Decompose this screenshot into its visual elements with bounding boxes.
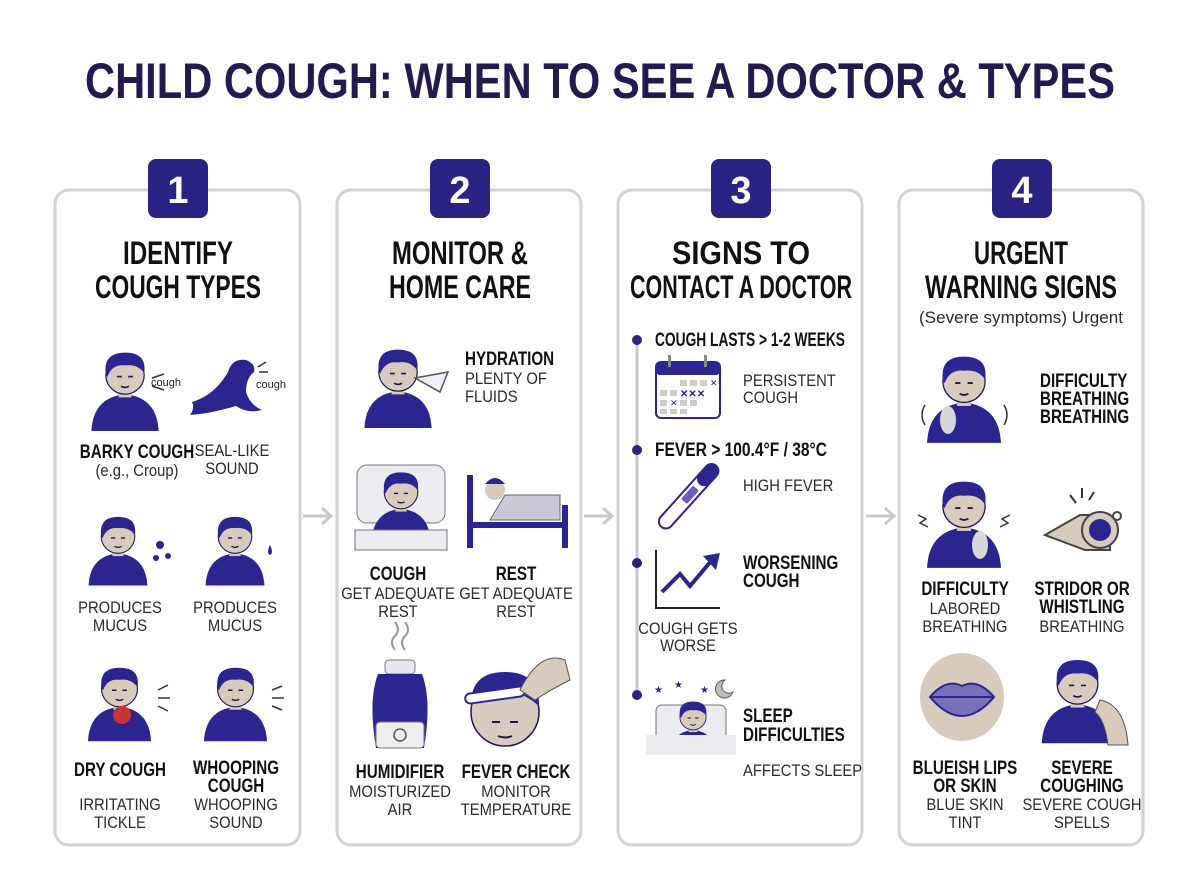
label: produces mucus 1: MUCUS — [93, 617, 147, 635]
label: hydration: HYDRATION — [465, 347, 554, 369]
label: hydration: PLENTY OF — [465, 370, 547, 388]
badge 2: 2 — [449, 170, 471, 212]
icon: seal — [190, 360, 286, 415]
label: difficulty labored: BREATHING — [922, 618, 1008, 636]
label: worsening cough: WORSENING — [743, 551, 838, 573]
label: cough rest: COUGH — [370, 562, 426, 584]
label: hydration: FLUIDS — [465, 388, 518, 406]
label: blueish lips — [913, 756, 1017, 832]
heading 1: COUGH TYPES — [95, 269, 261, 305]
label: dry cough — [74, 758, 166, 832]
label: cough gets worse: WORSE — [660, 637, 716, 655]
label: high fever: HIGH FEVER — [743, 477, 833, 495]
icon: calendar: ✕✕✕ — [680, 389, 705, 400]
label: fever check: MONITOR — [481, 783, 551, 801]
label: blueish lips: TINT — [949, 814, 982, 832]
label: cough rest: GET ADEQUATE — [341, 585, 455, 603]
icon: seal: cough — [256, 379, 286, 391]
heading 2 — [389, 235, 531, 305]
label: fever: FEVER > 100.4°F / 38°C — [655, 440, 827, 461]
label: produces mucus 1: PRODUCES — [78, 599, 162, 617]
heading 3 — [630, 235, 852, 305]
label: difficulty labored: LABORED — [930, 600, 1000, 618]
icon: calendar: ✕ — [710, 378, 718, 388]
panel: urgent warning signs — [899, 159, 1143, 845]
icon: sleeping kid: ★ — [674, 680, 683, 691]
label: dry cough: IRRITATING — [79, 796, 161, 814]
label: difficulty breathing: DIFFICULTY — [1040, 369, 1128, 391]
label: humidifier: AIR — [388, 801, 412, 819]
badge 3 — [711, 159, 771, 218]
label: cough gets worse — [638, 620, 738, 655]
label: rest: GET ADEQUATE — [459, 585, 573, 603]
label: barky cough — [80, 440, 194, 480]
timeline — [632, 335, 642, 700]
label: difficulty breathing: BREATHING — [1040, 387, 1129, 409]
label: produces mucus 2: MUCUS — [208, 617, 262, 635]
icon: barky cough kid: cough — [151, 377, 181, 389]
label: rest — [459, 562, 573, 621]
label: rest: REST — [496, 562, 537, 584]
label: fever check: TEMPERATURE — [461, 801, 571, 819]
label: stridor: WHISTLING — [1039, 595, 1125, 617]
badge 3: 3 — [730, 170, 752, 212]
label: cough lasts: COUGH LASTS > 1-2 WEEKS — [655, 330, 845, 351]
heading 3: SIGNS TO — [672, 235, 810, 271]
label: severe coughing: SEVERE COUGH — [1022, 796, 1142, 814]
label: sleep difficulties: SLEEP — [743, 704, 793, 726]
heading 2: MONITOR & — [392, 235, 528, 271]
label: difficulty breathing — [1040, 369, 1129, 427]
icon: whooping kid — [204, 668, 284, 741]
badge 1 — [148, 159, 208, 218]
icon: severe cough kid — [1042, 660, 1128, 745]
heading 3: CONTACT A DOCTOR — [630, 269, 852, 305]
label: dry cough: TICKLE — [94, 814, 146, 832]
label: hydration — [465, 347, 554, 406]
label: severe coughing — [1022, 756, 1142, 832]
badge 2 — [430, 159, 490, 218]
heading 4: URGENT — [974, 235, 1068, 271]
badge 4: 4 — [1011, 170, 1033, 212]
label: humidifier: HUMIDIFIER — [356, 760, 445, 782]
heading 2: HOME CARE — [389, 269, 531, 305]
label: persistent cough: COUGH — [743, 389, 798, 407]
icon: chart — [656, 550, 720, 608]
label: cough gets worse: COUGH GETS — [638, 620, 738, 638]
icon: fever check — [465, 658, 570, 746]
label: blueish lips: BLUE SKIN — [926, 796, 1004, 814]
label: persistent cough: PERSISTENT — [743, 372, 836, 390]
label: blueish lips: OR SKIN — [933, 774, 997, 796]
label: humidifier — [349, 760, 451, 819]
label: sleep difficulties — [743, 704, 845, 745]
arrow: 3 to 4 — [866, 508, 894, 524]
label: humidifier: MOISTURIZED — [349, 783, 451, 801]
badge 4 — [992, 159, 1052, 218]
label: fever check — [461, 760, 571, 819]
icon: whistle — [1045, 488, 1121, 550]
icon: sleeping kid — [646, 680, 736, 755]
label: whooping: SOUND — [209, 814, 263, 832]
label: severe coughing: COUGHING — [1040, 774, 1124, 796]
icon: humidifier — [372, 622, 428, 748]
icon: mucus kid 1 — [89, 517, 171, 586]
label: rest: REST — [496, 603, 536, 621]
label: barky cough: (e.g., Croup) — [96, 462, 178, 480]
label: worsening cough — [743, 551, 838, 591]
icon: bed — [470, 475, 565, 548]
panel: signs to contact a doctor — [618, 159, 862, 845]
label: whooping: WHOOPING — [194, 796, 278, 814]
icon: calendar — [656, 355, 720, 418]
icon: sleeping kid: ★ — [654, 685, 663, 696]
label: affects sleep: AFFECTS SLEEP — [743, 762, 862, 780]
icon: lips — [920, 653, 1004, 741]
label: difficulty labored: DIFFICULTY — [921, 577, 1009, 599]
label: severe coughing: SPELLS — [1054, 814, 1110, 832]
label: difficulty labored — [921, 577, 1009, 636]
icon: drinking kid — [364, 350, 448, 428]
panel: monitor & home care — [337, 159, 581, 845]
heading 4: WARNING SIGNS — [925, 269, 1117, 305]
arrow: 2 to 3 — [584, 508, 612, 524]
label: difficulty breathing: BREATHING — [1040, 405, 1129, 427]
label: stridor — [1034, 577, 1130, 636]
heading 4 — [925, 235, 1117, 305]
icon: calendar: ✕ — [670, 398, 678, 408]
icon: dry cough kid — [88, 668, 170, 741]
label: produces mucus 2 — [193, 599, 277, 635]
label: fever check: FEVER CHECK — [462, 760, 571, 782]
icon: barky cough kid — [91, 353, 181, 431]
icon: sleeping kid: ★ — [700, 685, 709, 696]
label: whooping — [193, 756, 279, 832]
label: persistent cough — [743, 372, 836, 407]
icon: breathing kid — [922, 357, 1007, 443]
label: sleep difficulties: DIFFICULTIES — [743, 723, 845, 745]
label: worsening cough: COUGH — [743, 569, 800, 591]
icon: thermometer — [656, 461, 721, 531]
icon: kid on pillow — [355, 465, 447, 550]
label: dry cough: DRY COUGH — [74, 758, 166, 780]
label: seal-like: SOUND — [205, 460, 259, 478]
label: stridor: BREATHING — [1039, 618, 1125, 636]
subheading: (Severe symptoms) Urgent — [919, 308, 1123, 327]
label: cough rest — [341, 562, 455, 621]
badge 1: 1 — [167, 170, 189, 212]
label: severe coughing: SEVERE — [1051, 756, 1113, 778]
panel: identify cough types — [55, 159, 300, 845]
label: cough rest: REST — [378, 603, 418, 621]
label: produces mucus 1 — [78, 599, 162, 635]
icon: labored kid — [918, 482, 1010, 568]
label: whooping: COUGH — [208, 774, 264, 796]
heading 1: IDENTIFY — [123, 235, 233, 271]
label: stridor: STRIDOR OR — [1034, 577, 1130, 599]
label: whooping: WHOOPING — [193, 756, 279, 778]
label: blueish lips: BLUEISH LIPS — [913, 756, 1017, 778]
heading 1 — [95, 235, 261, 305]
label: produces mucus 2: PRODUCES — [193, 599, 277, 617]
label: barky cough: BARKY COUGH — [80, 440, 194, 462]
label: seal-like: SEAL-LIKE — [195, 442, 269, 460]
icon: mucus kid 2 — [206, 517, 272, 586]
arrow: 1 to 2 — [303, 508, 331, 524]
label: seal-like — [195, 442, 269, 478]
